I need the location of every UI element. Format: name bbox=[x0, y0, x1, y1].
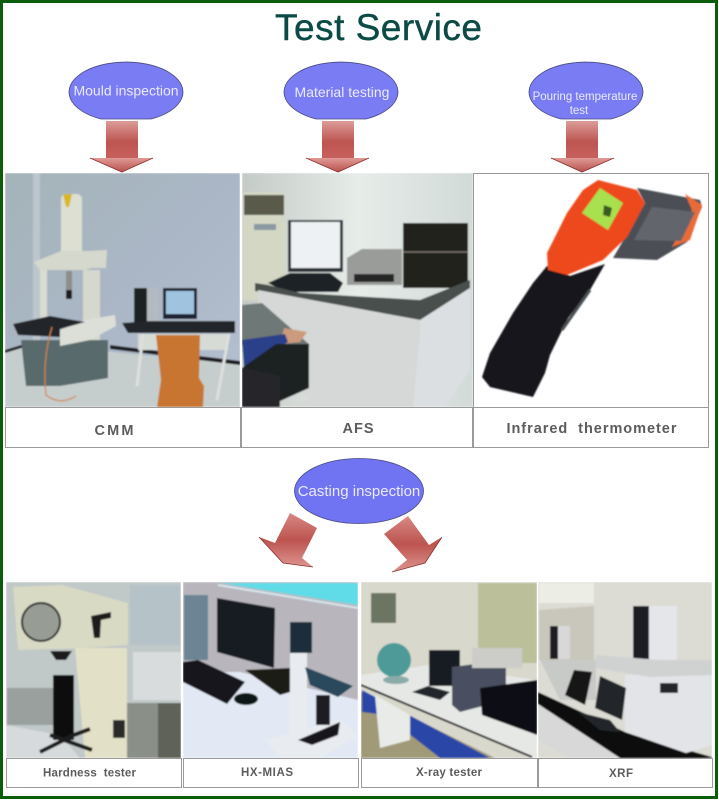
bubble: Pouring temperature test: test bbox=[570, 105, 589, 117]
panel: HX-MIAS bbox=[183, 582, 358, 788]
caption: AFS bbox=[242, 408, 472, 448]
caption: CMM bbox=[6, 408, 240, 448]
caption: CMM: CMM bbox=[94, 423, 134, 439]
caption: HX-MIAS bbox=[184, 758, 358, 788]
photo: infrared thermometer bbox=[474, 174, 708, 408]
photo: coordinate measuring machine bbox=[5, 173, 240, 407]
caption: AFS: AFS bbox=[342, 421, 374, 437]
photo: X-ray tester lab bench bbox=[361, 582, 537, 758]
caption: HX-MIAS: HX-MIAS bbox=[241, 767, 293, 779]
bubble: Mould inspection: Mould inspection bbox=[73, 82, 179, 98]
photo: metallographic microscope bbox=[183, 582, 358, 758]
caption: XRF: XRF bbox=[609, 768, 633, 780]
photo: hardness tester bbox=[6, 582, 181, 758]
title: Test Service bbox=[275, 7, 482, 48]
caption: X-ray tester bbox=[362, 758, 538, 788]
caption: X-ray tester: X-ray tester bbox=[416, 767, 483, 779]
panel: CMM bbox=[5, 173, 240, 448]
arrow: Casting inspection to left bbox=[259, 513, 317, 567]
panel: XRF bbox=[538, 582, 712, 788]
caption: Hardness tester: Hardness tester bbox=[43, 768, 137, 780]
bubble: Material testing bbox=[284, 62, 398, 119]
photo: XRF instruments bbox=[538, 582, 712, 758]
arrow: Mould inspection to CMM bbox=[90, 121, 153, 172]
photo: AFS spectrometer bbox=[242, 173, 473, 407]
arrow: Material testing to AFS bbox=[306, 121, 369, 172]
panel: X-ray tester bbox=[361, 582, 538, 788]
bubble: Pouring temperature test: Pouring temperature bbox=[533, 91, 637, 103]
bubble: Casting inspection: Casting inspection bbox=[298, 483, 420, 500]
bubble: Material testing: Material testing bbox=[295, 84, 389, 100]
panel: Infrared thermometer bbox=[474, 174, 708, 448]
bubble: Casting inspection bbox=[294, 458, 424, 524]
panel: AFS bbox=[242, 173, 473, 448]
arrow: Pouring temperature to thermometer bbox=[551, 121, 614, 172]
caption: Infrared thermometer bbox=[474, 408, 708, 448]
arrow: Casting inspection to right bbox=[384, 516, 442, 572]
caption: XRF bbox=[538, 758, 712, 788]
caption: Infrared thermometer: Infrared thermometer bbox=[506, 421, 677, 437]
bubble: Mould inspection bbox=[69, 62, 183, 119]
panel: Hardness tester bbox=[6, 582, 182, 788]
caption: Hardness tester bbox=[6, 758, 182, 788]
bubble: Pouring temperature test bbox=[529, 62, 643, 119]
